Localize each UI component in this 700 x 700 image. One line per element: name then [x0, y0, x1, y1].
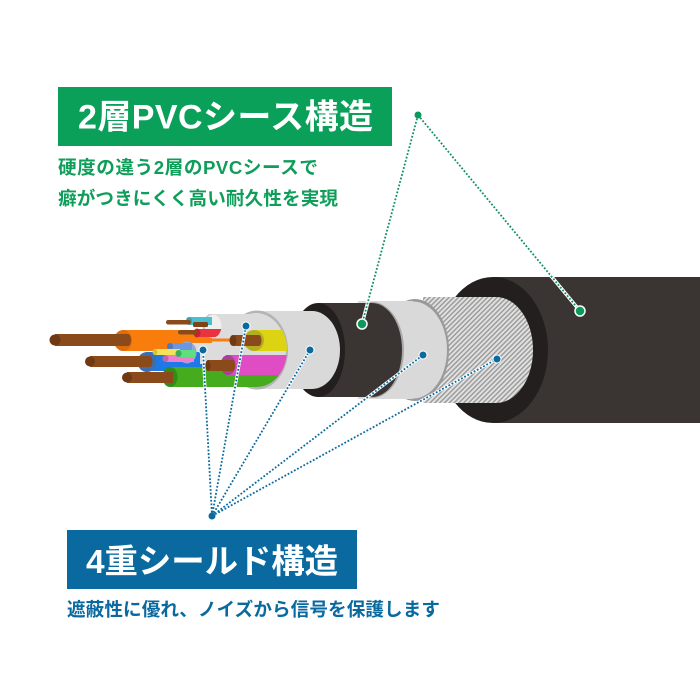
heading: 4-layer shield [67, 530, 357, 589]
small wires top bundle [166, 314, 224, 338]
heading: 2-layer PVC sheath [58, 87, 392, 146]
yellow wire [230, 330, 290, 351]
inner black PVC sheath [291, 302, 404, 398]
text: PVC sheath description: 癖がつきにくく高い耐久性を実現 [58, 188, 338, 209]
text: PVC sheath description: 硬度の違う2層のPVCシースで [58, 157, 318, 178]
text: shield description: 遮蔽性に優れ、ノイズから信号を保護します [67, 599, 440, 620]
outer black PVC jacket [438, 277, 700, 423]
outer grey shield layer [226, 310, 340, 390]
orange wire [50, 330, 236, 351]
blue wire [85, 352, 206, 372]
magenta wire [206, 355, 288, 375]
heading: 2-layer PVC sheath: 2層PVCシース構造 [78, 98, 373, 136]
cable illustration [50, 277, 700, 423]
braided shield [423, 297, 533, 403]
leader lines: 4-layer shield [199, 322, 501, 520]
heading: 4-layer shield: 4重シールド構造 [86, 544, 338, 581]
inner grey shield layer [186, 313, 286, 387]
text: PVC sheath description [58, 157, 338, 209]
leader lines: 2-layer PVC sheath [357, 112, 585, 329]
small wires lower bundle [152, 342, 196, 364]
foil shield sleeve [358, 299, 449, 401]
green wire [122, 367, 290, 387]
